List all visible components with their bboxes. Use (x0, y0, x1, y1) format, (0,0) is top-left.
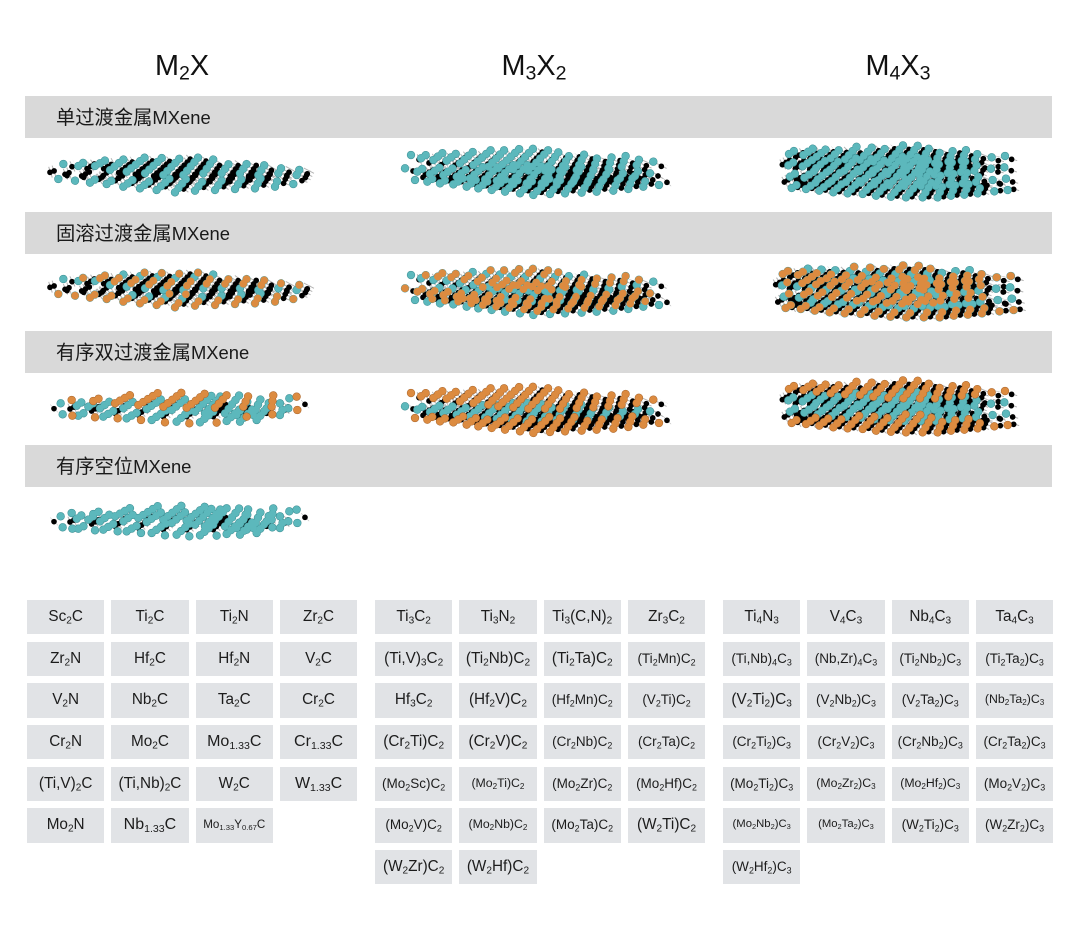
cell (27, 767, 104, 801)
cell (807, 808, 885, 842)
structure: M4X3 ordered double metal (782, 380, 1014, 432)
cell (27, 642, 104, 676)
cell: (Mo2Hf)C2 (636, 776, 697, 792)
cell (375, 600, 452, 634)
cell (544, 683, 621, 718)
cell: Ti2N (220, 608, 249, 627)
cell (459, 808, 537, 842)
cell: V2C (305, 650, 332, 668)
cell: Ta4C3 (995, 608, 1034, 627)
title: M3X2: M3X2 (502, 50, 566, 84)
cell: Hf3C2 (395, 691, 432, 710)
cell: (W2Hf2)C3 (732, 859, 792, 875)
cell (723, 767, 800, 801)
cell: (Hf2V)C2 (469, 691, 527, 710)
cell: (V2Ti)C2 (642, 692, 691, 709)
cell (807, 767, 885, 801)
cell: (W2Zr2)C3 (985, 817, 1044, 834)
cell: (Mo2Ti)C2 (471, 776, 524, 791)
cell (375, 850, 452, 884)
cell: Hf2C (134, 650, 166, 668)
cell (375, 767, 452, 801)
cell (111, 808, 189, 842)
cell (976, 767, 1053, 801)
cell (628, 600, 705, 634)
cell (280, 600, 357, 634)
cell: Nb4C3 (909, 608, 951, 627)
cell (111, 767, 189, 801)
cell (976, 642, 1053, 676)
structure: M2X single metal (50, 156, 309, 192)
cell: (Mo2V2)C3 (984, 776, 1045, 792)
cell: Ti3C2 (396, 608, 431, 627)
cell (459, 642, 537, 676)
cell (111, 683, 189, 718)
cell: (Ti,V)2C (39, 775, 92, 793)
cell (723, 600, 800, 634)
cell (280, 767, 357, 801)
cell (892, 642, 969, 676)
cell (196, 767, 273, 801)
cell: (Mo2Nb)C2 (468, 817, 527, 832)
cell: (Ti2Nb)C2 (466, 650, 530, 668)
cell (375, 642, 452, 676)
cell: (Mo2Ti2)C3 (730, 776, 793, 792)
structure: M2X ordered double metal (54, 390, 305, 423)
structure: M2X solid solution (50, 271, 309, 307)
cell: (Ti2Nb2)C3 (899, 651, 961, 667)
cell (375, 683, 452, 718)
cell (196, 725, 273, 759)
cell (459, 725, 537, 759)
cell: (Mo2Sc)C2 (382, 776, 445, 792)
cell: Ti3N2 (481, 608, 515, 627)
cell: (Ti2Mn)C2 (637, 651, 696, 667)
cell (111, 600, 189, 634)
cell (628, 808, 705, 842)
cell (111, 725, 189, 759)
cell: Mo2N (47, 816, 85, 835)
cell (723, 725, 800, 759)
panel: M4X3 compositions (723, 600, 1053, 884)
cell: (Mo2Ta)C2 (551, 817, 613, 834)
cell: (Hf2Mn)C2 (552, 692, 613, 709)
cell (459, 767, 537, 801)
cell (807, 725, 885, 759)
cell (280, 725, 357, 759)
cell: Mo1.33Y0.67C (203, 818, 265, 832)
cell: (Cr2Ti)C2 (383, 733, 444, 752)
cell: (V2Ti2)C3 (731, 691, 792, 710)
cell: V4C3 (830, 608, 862, 627)
cell (544, 808, 621, 842)
cell: Ti4N3 (744, 608, 779, 627)
cell: (Mo2Ta2)C3 (818, 818, 874, 831)
cell (459, 683, 537, 718)
cell (111, 642, 189, 676)
panel: M3X2 compositions (375, 600, 705, 884)
heading band: single transition metal MXene: 单过渡金属MXene (56, 102, 211, 130)
cell (976, 725, 1053, 759)
cell (544, 642, 621, 676)
cell: Cr2N (49, 733, 82, 752)
cell (976, 683, 1053, 718)
heading band: solid solution MXene: 固溶过渡金属MXene (56, 218, 230, 246)
title: M4X3: M4X3 (866, 50, 930, 84)
cell (892, 683, 969, 718)
cell: (Ti,V)3C2 (384, 650, 443, 668)
structure: M3X2 solid solution (405, 267, 667, 315)
cell: Zr3C2 (648, 608, 685, 627)
cell: (Cr2Ta2)C3 (983, 734, 1046, 750)
cell: (W2Ti2)C3 (902, 817, 959, 834)
cell (976, 600, 1053, 634)
structure: M4X3 solid solution (776, 265, 1020, 317)
heading band: ordered vacancy MXene: 有序空位MXene (56, 451, 191, 479)
cell (807, 600, 885, 634)
cell (544, 767, 621, 801)
cell: (W2Hf)C2 (467, 858, 529, 877)
cell: (Cr2Ti2)C3 (732, 734, 791, 750)
cell: (Cr2Ta)C2 (638, 734, 695, 750)
cell (280, 683, 357, 718)
atomic structures (47, 141, 1026, 540)
cell: (V2Nb2)C3 (816, 692, 876, 709)
heading band: ordered double transition metal MXene (25, 331, 1052, 373)
cell (892, 808, 969, 842)
cell: (Nb,Zr)4C3 (815, 651, 877, 667)
cell (723, 683, 800, 718)
cell: (Ti2Ta2)C3 (985, 651, 1044, 667)
cell: Sc2C (48, 608, 83, 627)
heading band: solid solution MXene (25, 212, 1052, 254)
cell: Mo2C (131, 733, 169, 752)
cell: (Cr2V2)C3 (817, 734, 874, 750)
cell (892, 767, 969, 801)
cell (976, 808, 1053, 842)
structure: M3X2 ordered double metal (405, 385, 667, 433)
cell (892, 600, 969, 634)
cell (807, 642, 885, 676)
cell: Mo1.33C (207, 733, 261, 752)
cell: Ti2C (136, 608, 164, 627)
cell (628, 767, 705, 801)
cell (27, 683, 104, 718)
cell: (Ti,Nb)2C (119, 775, 181, 793)
cell (196, 683, 273, 718)
cell (723, 808, 800, 842)
cell: V2N (52, 691, 79, 710)
cell: W1.33C (295, 775, 342, 793)
cell: Cr2C (302, 691, 335, 710)
cell (544, 600, 621, 634)
cell: (Mo2Nb2)C3 (733, 818, 791, 831)
cell (459, 600, 537, 634)
cell: Zr2C (303, 608, 334, 627)
cell (723, 850, 800, 884)
panel: M2X compositions (27, 600, 357, 843)
cell (280, 642, 357, 676)
cell: (Mo2V)C2 (385, 817, 442, 834)
cell (196, 642, 273, 676)
cell: (Mo2Zr2)C3 (816, 776, 876, 791)
cell: (W2Ti)C2 (637, 816, 696, 835)
structure: M2X ordered vacancy (54, 503, 305, 536)
cell (723, 642, 800, 676)
cell (375, 808, 452, 842)
structure: M4X3 single metal (782, 145, 1014, 197)
cell: W2C (219, 775, 250, 793)
cell (628, 642, 705, 676)
heading band: single transition metal MXene (25, 96, 1052, 138)
cell (375, 725, 452, 759)
cell (892, 725, 969, 759)
cell: (Cr2V)C2 (469, 733, 527, 752)
cell: Zr2N (50, 650, 81, 668)
cell: (W2Zr)C2 (383, 858, 444, 877)
cell (459, 850, 537, 884)
cell: Hf2N (218, 650, 250, 668)
cell: (V2Ta2)C3 (902, 692, 959, 709)
cell: (Cr2Nb2)C3 (898, 734, 963, 750)
cell (628, 683, 705, 718)
cell (196, 600, 273, 634)
title: M2X: M2X (155, 50, 209, 84)
cell: Ti3(C,N)2 (552, 608, 612, 627)
cell (27, 725, 104, 759)
cell (27, 808, 104, 842)
heading band: ordered double transition metal MXene: 有序双过渡金属MXene (56, 337, 249, 365)
cell (27, 600, 104, 634)
cell: (Mo2Zr)C2 (552, 776, 612, 792)
cell (544, 725, 621, 759)
cell (196, 808, 273, 842)
cell (807, 683, 885, 718)
cell: (Nb2Ta2)C3 (985, 692, 1044, 707)
cell: (Ti,Nb)4C3 (731, 651, 792, 667)
cell: Nb1.33C (124, 816, 176, 835)
cell (628, 725, 705, 759)
cell: Nb2C (132, 691, 168, 710)
cell: (Ti2Ta)C2 (552, 650, 613, 668)
cell: Ta2C (218, 691, 251, 710)
cell: (Cr2Nb)C2 (552, 734, 612, 750)
structure: M3X2 single metal (405, 147, 667, 195)
cell: (Mo2Hf2)C3 (900, 776, 960, 791)
heading band: ordered vacancy MXene (25, 445, 1052, 487)
cell: Cr1.33C (294, 733, 343, 752)
